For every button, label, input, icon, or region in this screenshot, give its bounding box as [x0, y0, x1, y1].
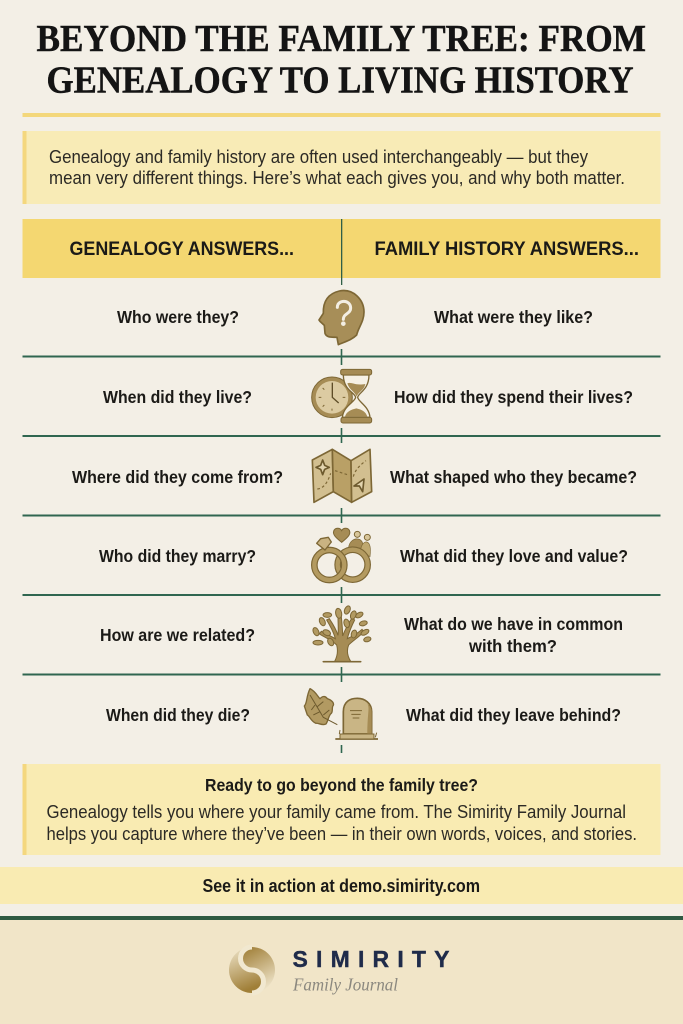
row 1 text: What were they like? [434, 307, 593, 327]
footer [0, 916, 683, 1024]
row 6 text [106, 705, 621, 725]
icon: clock and hourglass [312, 369, 372, 423]
callout: ready to go beyond [22, 764, 660, 855]
row 4 text: Who did they marry? [99, 546, 256, 566]
icon: leaf and gravestone [304, 689, 378, 739]
icon: head with question mark [319, 291, 364, 345]
panel: intro [22, 131, 660, 204]
row 1 text [117, 307, 593, 327]
logo mark [229, 947, 275, 993]
callout: ready to go beyond: Genealogy tells you where your family came from. The Simirity Family Journal [46, 801, 626, 822]
icon: wedding rings, heart and couple [314, 528, 370, 580]
row 1 text: Who were they? [117, 307, 239, 327]
call to action band [0, 867, 683, 904]
row 2 text [103, 387, 633, 407]
title: GENEALOGY TO LIVING HISTORY [46, 60, 634, 102]
logo wordmark [292, 946, 450, 994]
row 2 text: When did they live? [103, 387, 252, 407]
panel: column headers: GENEALOGY ANSWERS... [70, 238, 294, 260]
row 3 text [72, 467, 637, 487]
row 5 text: How are we related? [100, 625, 255, 645]
title [36, 18, 646, 102]
logo wordmark: SIMIRITY [292, 946, 450, 972]
row 5 text [100, 614, 623, 656]
call to action band: See it in action at demo.simirity.com [202, 876, 480, 896]
icon: folded map [312, 449, 372, 502]
row 4 text [99, 546, 628, 566]
panel: intro: Genealogy and family history are often used interchangeably — but they [49, 146, 589, 167]
row 6 text: What did they leave behind? [406, 705, 621, 725]
row 6 text: When did they die? [106, 705, 250, 725]
logo wordmark: Family Journal [292, 974, 398, 994]
row 4 text: What did they love and value? [400, 546, 628, 566]
callout: ready to go beyond: Ready to go beyond the family tree? [205, 775, 478, 795]
panel: column headers: FAMILY HISTORY ANSWERS... [374, 238, 639, 260]
row 3 text: What shaped who they became? [390, 467, 637, 487]
panel: column headers [22, 219, 660, 285]
row 5 text: with them? [468, 636, 557, 656]
icon: family tree [312, 605, 371, 662]
row 3 text: Where did they come from? [72, 467, 283, 487]
row 2 text: How did they spend their lives? [394, 387, 633, 407]
row 5 text: What do we have in common [404, 614, 623, 634]
panel: intro: mean very different things. Here’s what each gives you, and why both matter. [49, 167, 625, 188]
